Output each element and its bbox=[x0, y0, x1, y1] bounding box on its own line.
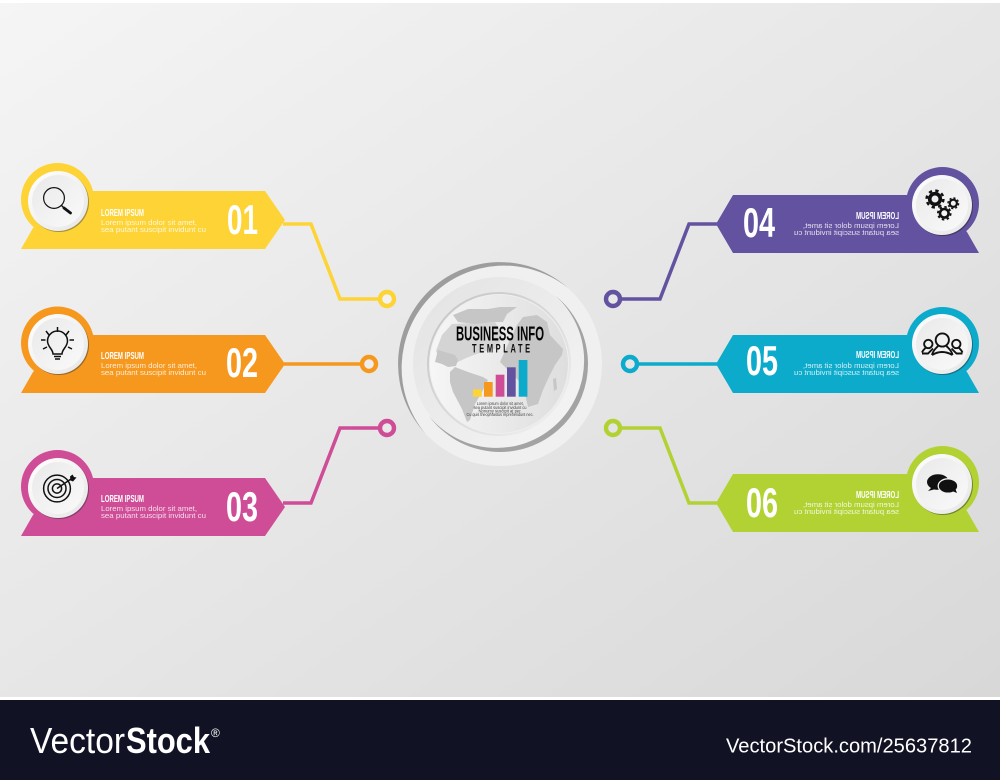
footer bar bbox=[0, 700, 1000, 780]
text block 01: sea putant suscipit invidunt cu bbox=[101, 225, 206, 234]
heading 03: LOREM IPSUM bbox=[101, 494, 144, 505]
panel: banner 04 bbox=[716, 167, 979, 253]
icon: people bbox=[922, 333, 962, 355]
text block 01 bbox=[101, 218, 206, 234]
inner arc bbox=[429, 296, 588, 452]
text block 06: Lorem ipsum dolor sit amet, bbox=[803, 500, 899, 509]
text block 01: Lorem ipsum dolor sit amet, bbox=[101, 218, 197, 227]
panel: banner 03 bbox=[21, 450, 285, 536]
text block 02 bbox=[101, 361, 206, 377]
number 05: 05 bbox=[746, 337, 778, 384]
connector line 05 bbox=[623, 357, 717, 371]
number 04: 04 bbox=[743, 199, 775, 246]
text block 05: sea putant suscipit invidunt cu bbox=[794, 368, 899, 377]
panel: banner 02 bbox=[21, 306, 285, 393]
text block: globe caption: Cu quis theophrastus reprehendunt nec. bbox=[466, 412, 534, 417]
footer logo: VectorStock: Vector bbox=[30, 720, 125, 761]
text block 04: sea putant suscipit invidunt cu bbox=[794, 228, 899, 237]
text block 03: sea putant suscipit invidunt cu bbox=[101, 511, 206, 520]
text block 03: Lorem ipsum dolor sit amet, bbox=[101, 504, 197, 513]
panel: banner 06 bbox=[716, 446, 979, 532]
connector line 02 bbox=[283, 357, 376, 371]
text block 06 bbox=[794, 500, 899, 516]
heading 01: LOREM IPSUM bbox=[101, 208, 144, 219]
panel: banner 01 bbox=[21, 163, 285, 249]
heading 04: LOREM IPSUM bbox=[856, 211, 899, 222]
text block: globe caption: Lorem ipsum dolor sit amet, bbox=[477, 401, 524, 406]
heading 05: LOREM IPSUM bbox=[856, 350, 899, 361]
connector line 03 bbox=[283, 421, 394, 503]
icon: target bbox=[44, 474, 76, 502]
icon: light bulb bbox=[41, 327, 74, 359]
text block 02: Lorem ipsum dolor sit amet, bbox=[101, 361, 197, 370]
text block: globe caption bbox=[466, 401, 534, 417]
outer arc bbox=[398, 262, 568, 434]
text block 05: Lorem ipsum dolor sit amet, bbox=[803, 361, 899, 370]
panel: central globe bbox=[398, 262, 602, 466]
subtitle: template: TEMPLATE bbox=[472, 343, 533, 356]
icon: gears bbox=[927, 191, 959, 220]
connector line 01 bbox=[283, 224, 394, 306]
text block 02: sea putant suscipit invidunt cu bbox=[101, 368, 206, 377]
footer logo: VectorStock: ® bbox=[211, 726, 220, 740]
text block 05 bbox=[794, 361, 899, 377]
text block: globe caption: Nonumy suscipit at per. bbox=[478, 408, 522, 413]
heading 06: LOREM IPSUM bbox=[856, 490, 899, 501]
heading 02: LOREM IPSUM bbox=[101, 351, 144, 362]
text block 03 bbox=[101, 504, 206, 520]
icon: speech bubbles bbox=[927, 474, 958, 493]
connector line 06 bbox=[606, 421, 717, 503]
text block 06: sea putant suscipit invidunt cu bbox=[794, 507, 899, 516]
footer logo: VectorStock: Stock bbox=[126, 720, 211, 761]
title: business info: BUSINESS INFO bbox=[456, 324, 544, 346]
number 03: 03 bbox=[226, 483, 258, 530]
text block 04 bbox=[794, 221, 899, 237]
bar chart bbox=[473, 360, 527, 397]
world map bbox=[435, 307, 563, 422]
number 06: 06 bbox=[746, 479, 778, 526]
number 02: 02 bbox=[226, 339, 258, 386]
text block 04: Lorem ipsum dolor sit amet, bbox=[803, 221, 899, 230]
footer url: VectorStock.com/25637812 bbox=[726, 736, 972, 758]
footer logo: VectorStock bbox=[30, 720, 220, 761]
number 01: 01 bbox=[227, 196, 258, 243]
connector line 04 bbox=[606, 224, 717, 306]
panel: banner 05 bbox=[716, 307, 979, 393]
icon: magnifier bbox=[44, 188, 70, 213]
text block: globe caption: sea putant suscipit invidunt cu bbox=[474, 405, 527, 410]
